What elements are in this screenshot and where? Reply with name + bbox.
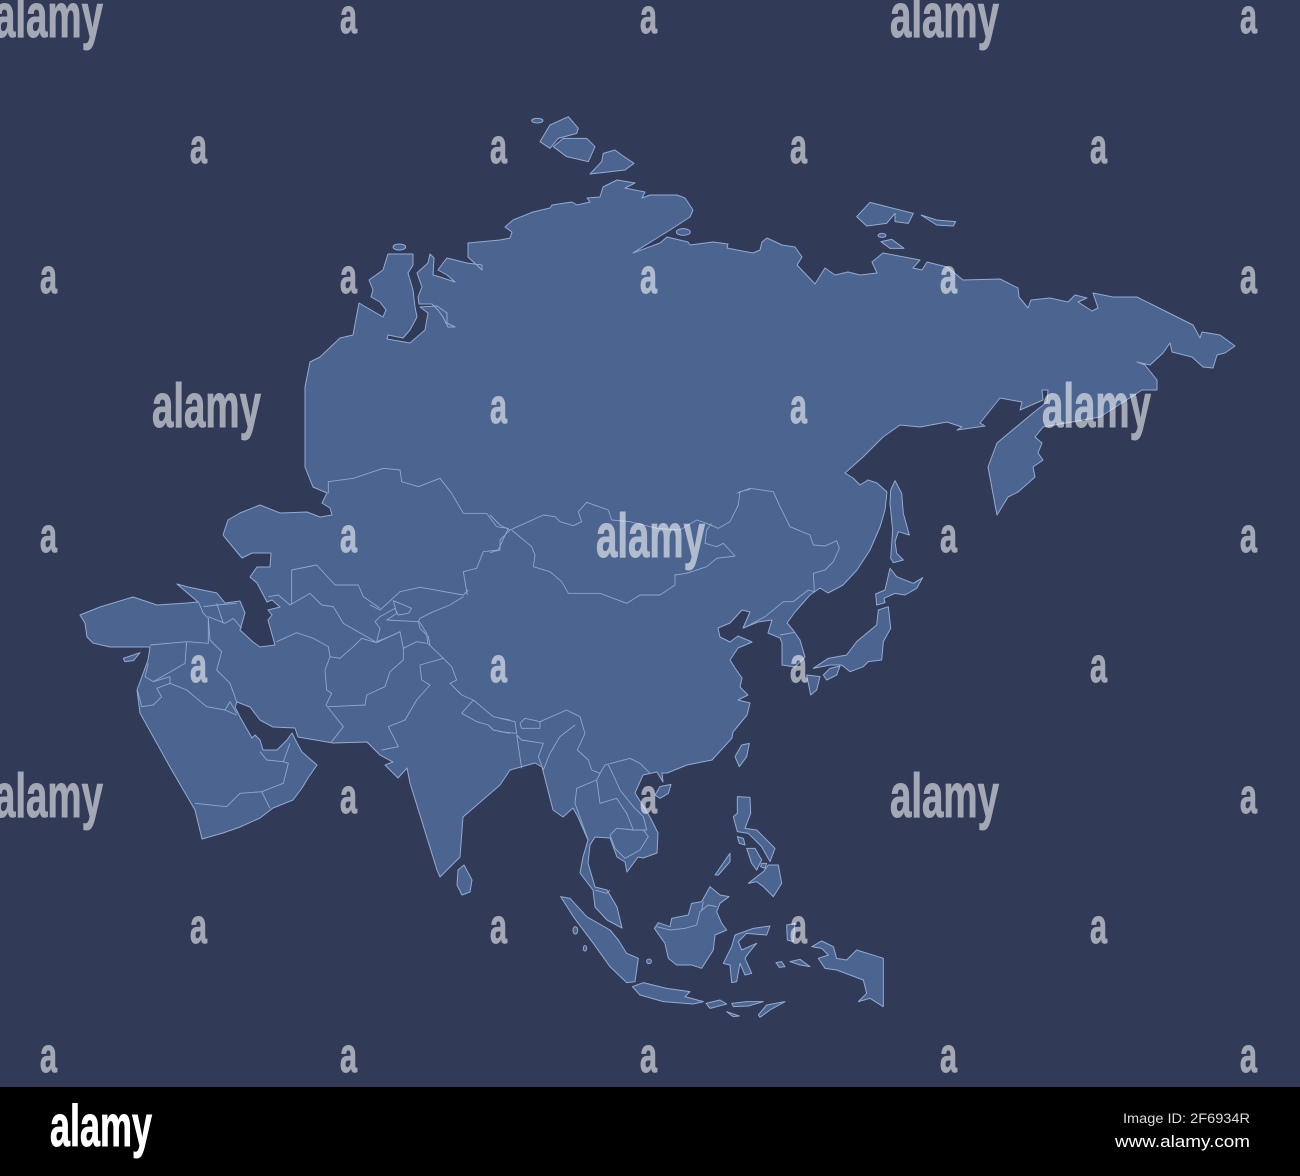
islands: Sakhalin and Hokkaido — [876, 481, 923, 605]
map of Asia — [80, 117, 1235, 1017]
small watermark letters: a — [190, 639, 207, 693]
small watermark letters: a — [1240, 509, 1257, 563]
small watermark letters: a — [190, 900, 207, 954]
islands: New Siberian group — [857, 202, 956, 248]
small watermark letters: a — [940, 250, 957, 304]
country borders: west and central Asia — [137, 468, 510, 808]
website: www.alamy.com — [1114, 1132, 1250, 1151]
small watermark letters: a — [1090, 120, 1107, 174]
small watermark letters: a — [1240, 250, 1257, 304]
country borders: Mongolia — [490, 489, 750, 603]
mainland Asia — [80, 180, 1235, 928]
country borders: north-east China and Korea — [737, 488, 839, 635]
small watermark letters: a — [790, 380, 807, 434]
islands: Japan, Taiwan, Philippines, Indonesia — [561, 607, 891, 1017]
small watermark letters: a — [640, 250, 657, 304]
country borders: south-east Asia — [500, 710, 650, 893]
island: Cyprus — [123, 653, 140, 662]
small watermark letters: a — [490, 639, 507, 693]
islands: Arctic archipelago and Novaya lobes — [393, 117, 690, 250]
small watermark letters: a — [40, 250, 57, 304]
small watermark letters: a — [490, 900, 507, 954]
large watermark words — [0, 0, 1151, 831]
small watermark letters: a — [940, 1029, 957, 1083]
small watermark letters: a — [490, 380, 507, 434]
small watermark letters: a — [1090, 900, 1107, 954]
black footer bar — [0, 1087, 1300, 1176]
small watermark letters: a — [340, 1029, 357, 1083]
small watermark letters: a — [1090, 639, 1107, 693]
Borneo internal borders — [657, 902, 717, 930]
small watermark letters: a — [40, 509, 57, 563]
footer logo: alamy — [50, 1094, 152, 1159]
small watermark letters: a — [790, 900, 807, 954]
small watermark letters: a — [1240, 770, 1257, 824]
small watermark letters: a — [640, 1029, 657, 1083]
island: Sri Lanka — [457, 865, 472, 895]
small watermark letters: a — [790, 120, 807, 174]
small watermark letters: a — [340, 250, 357, 304]
large watermark words: alamy — [1042, 372, 1151, 441]
country borders: Kyrgyzstan, Tajikistan, Fergana valley — [370, 587, 468, 645]
small watermark letters: a — [40, 1029, 57, 1083]
small watermark letters: a — [790, 639, 807, 693]
small watermark letters: a — [190, 120, 207, 174]
image id: Image ID: 2F6934R — [1123, 1110, 1250, 1126]
small watermark letters: a — [940, 509, 957, 563]
large watermark words: alamy — [152, 372, 261, 441]
small watermark letters: a — [340, 770, 357, 824]
small watermark letters: a — [340, 509, 357, 563]
large watermark words: alamy — [596, 502, 705, 571]
small watermark letters: a — [640, 770, 657, 824]
small watermark letters: a — [490, 120, 507, 174]
large watermark words: alamy — [890, 762, 999, 831]
small watermark letters: a — [1240, 1029, 1257, 1083]
